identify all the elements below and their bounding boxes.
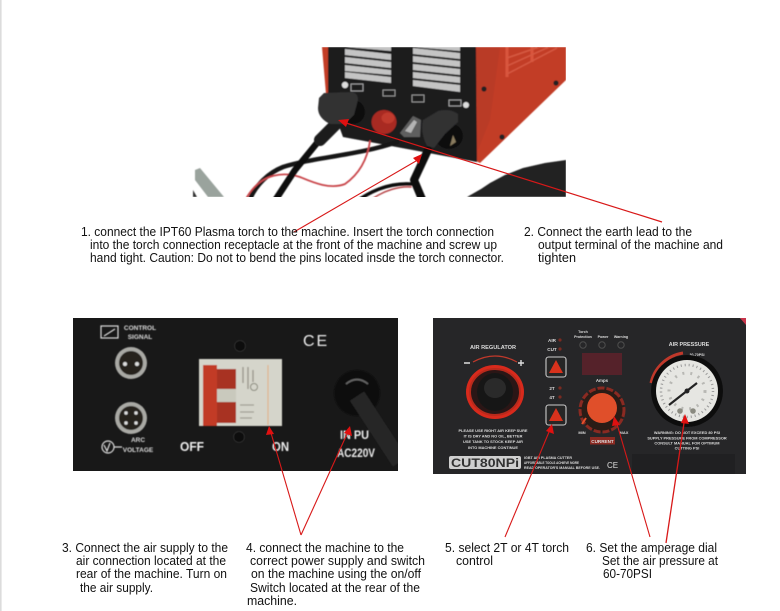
air warning text: INTO MACHINE CONTINUE bbox=[468, 445, 518, 450]
model description: AFFORDABLE TOOLS ACHIEVE MORE bbox=[524, 461, 579, 465]
arrows: steps 3 and 4 bbox=[271, 433, 347, 535]
air warning text: USE TANK TO STOCK KEEP AIR bbox=[463, 439, 523, 444]
label: arc voltage: ARC bbox=[131, 437, 145, 444]
air cut selector bbox=[546, 338, 566, 377]
model description: READ OPERATOR'S MANUAL BEFORE USE. bbox=[524, 466, 600, 470]
label: amps: Amps bbox=[596, 378, 609, 383]
indicator lights bbox=[574, 330, 628, 348]
label: control signal: CONTROL bbox=[124, 325, 156, 332]
power cable bbox=[334, 370, 400, 462]
pressure range arc bbox=[651, 353, 704, 383]
pressure warning text bbox=[647, 430, 727, 450]
pressure gauge bbox=[651, 355, 723, 427]
icon: control signal bbox=[101, 326, 118, 338]
label: current: CURRENT bbox=[591, 439, 614, 444]
air warning text bbox=[458, 430, 528, 449]
CE mark: CE bbox=[303, 333, 329, 350]
digital display bbox=[582, 353, 622, 375]
text: step 4: correct power supply and switch bbox=[250, 554, 425, 568]
labels: min max: MIN bbox=[578, 430, 586, 435]
panel: machine rear view bbox=[73, 318, 400, 471]
air cut selector: AIR bbox=[548, 338, 557, 343]
bracket bbox=[195, 168, 224, 197]
breaker switch bbox=[199, 359, 282, 426]
arrowhead: power cable bbox=[344, 426, 352, 436]
right earth connector bbox=[438, 126, 462, 148]
photo: machine front with torch and earth connections bbox=[193, 47, 566, 199]
model badge: CUT80NPi bbox=[451, 456, 519, 470]
machine red side panel bbox=[476, 47, 566, 163]
left torch connector bbox=[348, 102, 364, 124]
text: step 1: 1. connect the IPT60 Plasma torch to the machine. Insert the torch connection bbox=[81, 225, 494, 239]
indicator lights: Warning bbox=[614, 335, 628, 339]
cables bbox=[247, 122, 428, 199]
pressure warning text: SUPPLY PRESSURE FROM COMPRESSOR bbox=[647, 436, 727, 440]
panel labels bbox=[342, 82, 469, 108]
text: step 2: output terminal of the machine and bbox=[538, 238, 723, 252]
air cut selector: CUT bbox=[547, 347, 557, 352]
arrow: step 2 to earth connector bbox=[294, 154, 422, 232]
pressure warning text: WARNING: DO NOT EXCEED 80 PSI bbox=[654, 430, 720, 435]
text: step 2 bbox=[524, 225, 723, 265]
label: air pressure: AIR PRESSURE bbox=[669, 342, 710, 348]
2T 4T selector: 2T bbox=[549, 386, 555, 391]
label: off: OFF bbox=[180, 439, 204, 454]
text: step 3: rear of the machine. Turn on bbox=[76, 567, 227, 581]
panel: machine control panel: MAX bbox=[620, 430, 629, 435]
control signal socket bbox=[115, 347, 147, 379]
text: step 3 bbox=[62, 541, 228, 595]
text: step 1: hand tight. Caution: Do not to bend the pins located insde the torch connector. bbox=[90, 251, 504, 265]
air warning text: IT IS DRY AND NO OIL, BETTER bbox=[464, 434, 523, 438]
indicator lights: Protection bbox=[574, 335, 592, 339]
current dial bbox=[580, 388, 624, 432]
arc voltage socket bbox=[115, 402, 147, 434]
pressure warning text: CUTTING PSI bbox=[675, 446, 699, 450]
label: current bbox=[590, 437, 615, 444]
text: step 6: 60-70PSI bbox=[603, 567, 652, 581]
text: step 6 bbox=[586, 541, 718, 581]
text: step 5 bbox=[445, 541, 569, 568]
2T 4T selector bbox=[546, 386, 566, 425]
indicator lights: Power bbox=[598, 335, 609, 339]
air connector bbox=[400, 116, 421, 137]
vents bbox=[345, 47, 460, 92]
model description: IGBT AIR PLASMA CUTTER bbox=[524, 456, 572, 460]
small CE mark: CE bbox=[607, 461, 618, 470]
model description bbox=[524, 456, 600, 469]
label: AC220V: AC220V bbox=[337, 446, 375, 460]
text: step 4: on the machine using the on/off bbox=[251, 567, 421, 581]
torch bag bbox=[467, 160, 566, 197]
text: step 4: 4. connect the machine to the bbox=[246, 541, 404, 555]
arrow: step 5 bbox=[505, 424, 554, 537]
text: step 6: 6. Set the amperage dial bbox=[586, 541, 717, 555]
label: input: IN PU bbox=[340, 428, 369, 442]
panel: machine rear view: VOLTAGE bbox=[123, 447, 154, 454]
arrow: step 1 to torch connector bbox=[338, 119, 662, 222]
text: step 4: Switch located at the rear of the bbox=[250, 581, 420, 595]
text: step 5: 5. select 2T or 4T torch bbox=[445, 541, 569, 555]
text: step 3: 3. Connect the air supply to the bbox=[62, 541, 228, 555]
icon: arc voltage bbox=[102, 441, 122, 453]
label: air regulator: AIR REGULATOR bbox=[470, 345, 516, 351]
arrow: step 6 air pressure bbox=[666, 414, 689, 543]
text: step 4 bbox=[246, 541, 425, 608]
text: step 1: into the torch connection receptacle at the front of the machine and screw up bbox=[90, 238, 497, 252]
regulator scale bbox=[464, 356, 524, 366]
pressure warning text: CONSULT MANUAL FOR OPTIMUM bbox=[654, 440, 720, 446]
text: step 3: the air supply. bbox=[80, 581, 153, 595]
text: step 3: air connection located at the bbox=[76, 554, 226, 568]
panel: machine control panel bbox=[433, 318, 746, 474]
machine black front panel bbox=[327, 47, 477, 162]
air warning text: PLEASE USE RIGHT AIR KEEP SURE bbox=[459, 428, 528, 433]
indicator lights: Torch bbox=[578, 330, 588, 334]
arrowhead: breaker bbox=[266, 426, 274, 435]
panel: machine rear view: SIGNAL bbox=[128, 334, 152, 341]
text: step 2: 2. Connect the earth lead to the bbox=[524, 225, 692, 239]
red knob bbox=[372, 110, 396, 134]
arrow: step 6 amperage bbox=[612, 416, 650, 537]
2T 4T selector: 4T bbox=[549, 395, 555, 400]
air regulator knob bbox=[466, 365, 524, 419]
screws bbox=[234, 340, 246, 442]
text: step 1 bbox=[81, 225, 504, 265]
label: on: ON bbox=[272, 439, 289, 454]
text: step 4: machine. bbox=[247, 594, 297, 608]
pressure range arc: 30-70PSI bbox=[690, 353, 704, 357]
text: step 5: control bbox=[456, 554, 493, 568]
text: step 6: Set the air pressure at bbox=[602, 554, 718, 568]
text: step 2: tighten bbox=[538, 251, 576, 265]
